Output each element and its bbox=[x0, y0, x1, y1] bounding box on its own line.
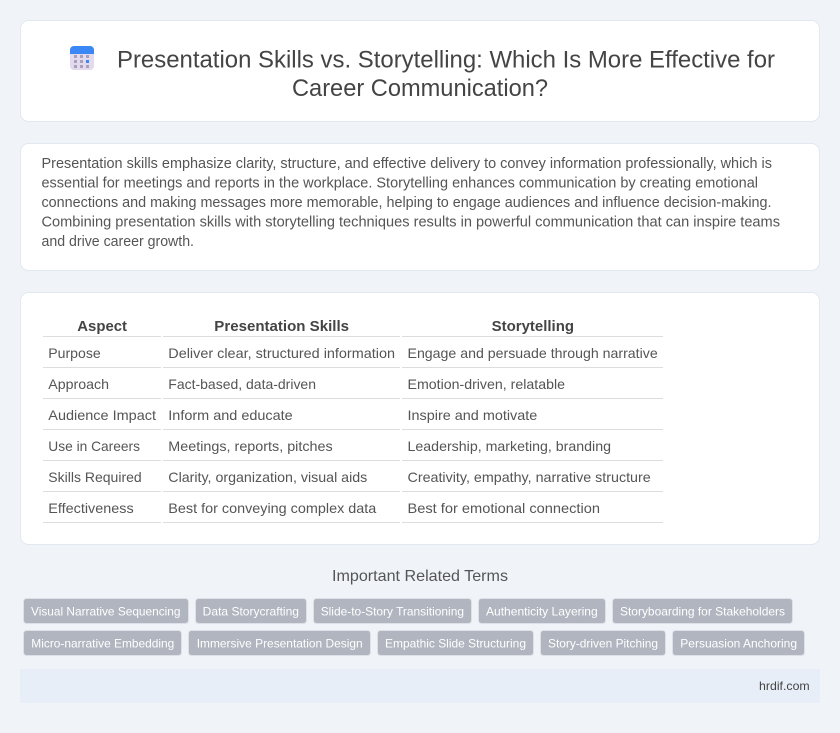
table row: audience impact: Inform and educate bbox=[168, 407, 293, 423]
text block: introduction bbox=[42, 156, 780, 250]
text block: introduction: essential for meetings and reports in the workplace. Storytelling enhances communication by creating emotional bbox=[42, 176, 758, 192]
text block: introduction: and drive career growth. bbox=[42, 234, 194, 250]
tag: story-driven pitching bbox=[540, 630, 666, 656]
table row: purpose: Purpose bbox=[48, 345, 101, 361]
panel: comparison table bbox=[20, 292, 820, 544]
table row: use in careers: Use in Careers bbox=[48, 438, 140, 454]
table row: approach: Emotion-driven, relatable bbox=[408, 376, 565, 392]
text block: introduction: Presentation skills emphasize clarity, structure, and effective delivery to convey information professionally, which is bbox=[42, 156, 772, 172]
tag: slide-to-story transitioning bbox=[314, 598, 472, 624]
tag: visual narrative sequencing bbox=[24, 598, 188, 624]
table header bbox=[77, 319, 574, 335]
tag: data storycrafting bbox=[196, 598, 306, 624]
tags: related terms bbox=[24, 598, 804, 656]
text block: introduction: connections and making messages more memorable, helping to engage audiences and influence decision-making. bbox=[42, 195, 772, 211]
tag: story-driven pitching: Story-driven Pitching bbox=[548, 636, 658, 650]
table row: approach bbox=[48, 376, 565, 392]
table row: use in careers: Meetings, reports, pitches bbox=[168, 438, 333, 454]
table header: Aspect bbox=[77, 319, 127, 335]
heading: important related terms: Important Related Terms bbox=[332, 568, 508, 585]
title bbox=[117, 46, 775, 102]
table row: approach: Approach bbox=[48, 376, 109, 392]
tag: persuasion anchoring bbox=[672, 630, 804, 656]
tag: micro-narrative embedding bbox=[24, 630, 182, 656]
tag: authenticity layering: Authenticity Layering bbox=[486, 604, 598, 618]
tag: data storycrafting: Data Storycrafting bbox=[203, 604, 299, 618]
tag: micro-narrative embedding: Micro-narrative Embedding bbox=[31, 636, 174, 650]
title: Presentation Skills vs. Storytelling: Which Is More Effective for bbox=[117, 46, 775, 74]
footer source text: hrdif.com bbox=[759, 679, 810, 693]
tag: empathic slide structuring bbox=[378, 630, 534, 656]
tag: slide-to-story transitioning: Slide-to-Story Transitioning bbox=[321, 604, 464, 618]
tag: immersive presentation design bbox=[188, 630, 370, 656]
table row: effectiveness: Effectiveness bbox=[48, 500, 134, 516]
icon: calendar bbox=[70, 46, 94, 70]
table row: audience impact: Inspire and motivate bbox=[408, 407, 538, 423]
table row: skills required: Clarity, organization, visual aids bbox=[168, 469, 367, 485]
tag: empathic slide structuring: Empathic Slide Structuring bbox=[385, 636, 526, 650]
table row: use in careers: Leadership, marketing, branding bbox=[408, 438, 611, 454]
table row: purpose: Deliver clear, structured information bbox=[168, 345, 395, 361]
table row: audience impact: Audience Impact bbox=[48, 407, 156, 423]
table row: approach: Fact-based, data-driven bbox=[168, 376, 316, 392]
footer bbox=[20, 669, 820, 703]
tag: storyboarding for stakeholders bbox=[612, 598, 792, 624]
tag: authenticity layering bbox=[478, 598, 606, 624]
tag: persuasion anchoring: Persuasion Anchoring bbox=[680, 636, 797, 650]
table row: effectiveness: Best for emotional connection bbox=[408, 500, 600, 516]
table row: purpose bbox=[48, 345, 658, 361]
panel: introduction bbox=[20, 144, 820, 270]
table row: skills required: Creativity, empathy, narrative structure bbox=[408, 469, 651, 485]
table row: use in careers bbox=[48, 438, 611, 454]
table row: skills required bbox=[48, 469, 651, 485]
table header: Storytelling bbox=[492, 319, 574, 335]
text block: introduction: Combining presentation skills with storytelling techniques results in powerful communication that can inspire teams bbox=[42, 214, 780, 230]
table row: skills required: Skills Required bbox=[48, 469, 142, 485]
tag: visual narrative sequencing: Visual Narrative Sequencing bbox=[31, 604, 180, 618]
table row: effectiveness bbox=[48, 500, 600, 516]
table row: effectiveness: Best for conveying complex data bbox=[168, 500, 377, 516]
tag: immersive presentation design: Immersive Presentation Design bbox=[197, 636, 363, 650]
title: Career Communication? bbox=[292, 75, 548, 102]
table row: purpose: Engage and persuade through narrative bbox=[408, 345, 658, 361]
table row: audience impact bbox=[48, 407, 538, 423]
panel: header bbox=[20, 20, 820, 122]
table header: Presentation Skills bbox=[214, 319, 349, 335]
tag: storyboarding for stakeholders: Storyboarding for Stakeholders bbox=[620, 604, 785, 618]
